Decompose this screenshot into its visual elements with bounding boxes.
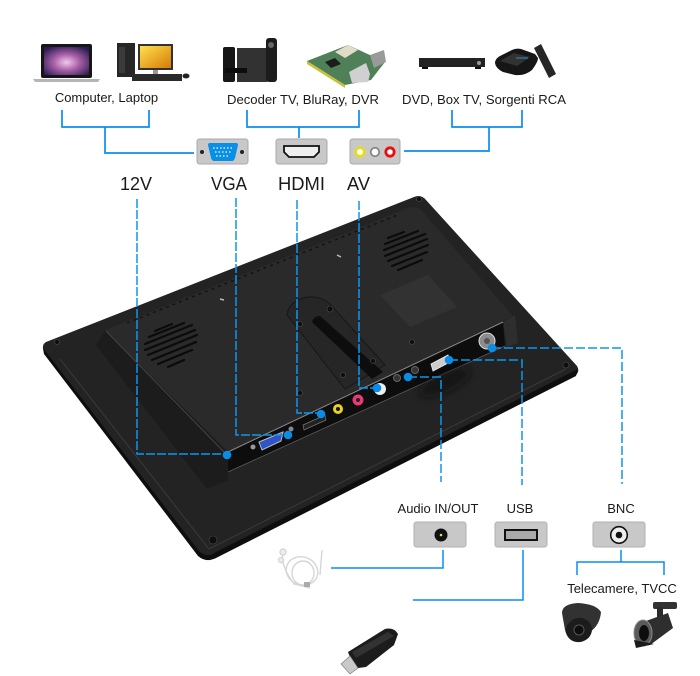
label: HDMI: HDMI xyxy=(278,173,325,194)
icon: VGA connector box xyxy=(197,139,248,164)
screws xyxy=(54,196,569,544)
text: Decoder TV, BluRay, DVR: Decoder TV, BluRay, DVR xyxy=(227,92,379,107)
ports xyxy=(250,333,495,450)
left end block xyxy=(96,330,228,489)
text: Telecamere, TVCC: Telecamere, TVCC xyxy=(567,581,677,596)
icon: TV box xyxy=(223,38,277,82)
VESA mount xyxy=(287,297,385,389)
icon: bullet camera xyxy=(634,602,677,648)
dashed callout: 12V xyxy=(137,199,231,459)
connector line: USB drive to USB xyxy=(413,550,523,600)
label: AV: AV xyxy=(347,173,371,194)
connector line: earphones to audio xyxy=(331,550,443,568)
label: 12V: 12V xyxy=(120,173,153,194)
icon: USB stick xyxy=(341,629,398,674)
top devices: decoder and board xyxy=(223,38,386,88)
connector lines: computer to VGA xyxy=(62,110,194,153)
port strip xyxy=(228,322,505,472)
dashed callout: AV xyxy=(359,201,381,392)
connector line: BNC to cameras xyxy=(577,550,664,575)
connector lines: DVD to AV xyxy=(404,110,522,151)
top devices: DVD and box TV xyxy=(419,44,556,78)
outer bezel xyxy=(43,196,578,559)
icon: desktop computer xyxy=(117,43,190,81)
connector lines: decoder to HDMI xyxy=(247,110,359,138)
text: Computer, Laptop: Computer, Laptop xyxy=(55,90,158,105)
icon: audio jack box xyxy=(414,522,466,547)
label: Audio IN/OUT: Audio IN/OUT xyxy=(398,501,479,516)
speaker grille left xyxy=(145,323,197,367)
icon: circuit board xyxy=(307,45,386,88)
text: DVD, Box TV, Sorgenti RCA: DVD, Box TV, Sorgenti RCA xyxy=(402,92,566,107)
label: BNC: BNC xyxy=(607,501,635,516)
shadow under ports xyxy=(415,361,475,403)
dashed callout: HDMI xyxy=(297,200,325,418)
monitor back panel xyxy=(43,196,578,560)
dashed callout: BNC xyxy=(488,344,622,484)
icon: android box xyxy=(495,44,556,78)
label sticker xyxy=(380,275,457,327)
icon: BNC port box xyxy=(593,522,645,547)
label: VGA: VGA xyxy=(211,173,248,194)
icon: laptop xyxy=(33,44,100,82)
right end block xyxy=(503,315,518,347)
icon: DVD player xyxy=(419,58,485,69)
speaker grille right xyxy=(384,231,428,270)
top devices: computer and laptop xyxy=(33,43,190,82)
raised rear housing xyxy=(105,207,513,452)
icon: earphones xyxy=(278,549,322,590)
icon: dome camera xyxy=(562,603,601,645)
label: USB: USB xyxy=(507,501,533,516)
dashed callout: USB xyxy=(445,356,522,485)
dashed callout: VGA xyxy=(236,198,292,439)
icon: AV connector box xyxy=(350,139,400,164)
icon: USB port box xyxy=(495,522,547,547)
icon: HDMI connector box xyxy=(276,139,327,164)
dashed callout: Audio xyxy=(404,373,441,482)
